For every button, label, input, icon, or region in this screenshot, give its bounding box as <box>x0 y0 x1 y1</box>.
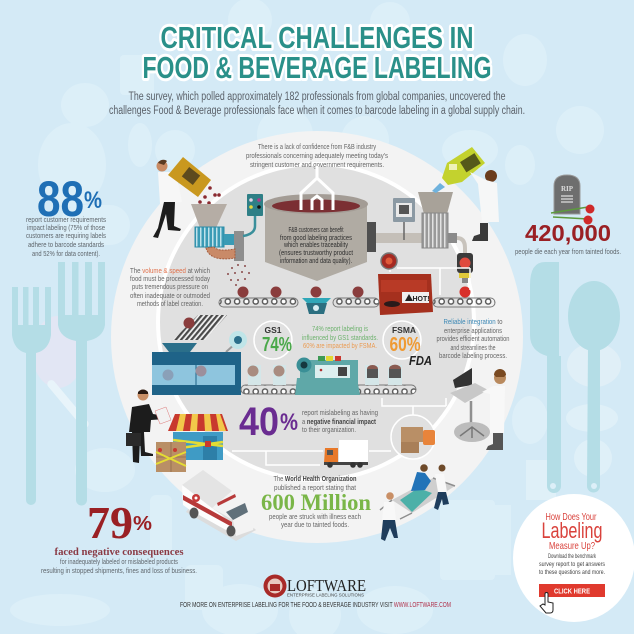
volume and speed text: puts tremendous pressure on <box>132 284 208 291</box>
negative impact text <box>302 408 378 434</box>
88 percent description: customers are requiring labels <box>26 231 106 240</box>
icon: person pouring bottle <box>432 147 499 241</box>
control panel <box>243 194 263 236</box>
40 percent stat <box>239 400 378 444</box>
WHO stat: published a report stating that <box>274 483 357 492</box>
Loftware logo <box>264 574 366 598</box>
88 percent description: adhere to barcode standards <box>28 240 104 249</box>
paramedics with stretcher <box>380 464 455 541</box>
FSMA stat: FSMA <box>392 325 416 335</box>
icon: small fork <box>12 287 51 505</box>
40 percent stat: 40 <box>239 400 279 444</box>
truck <box>324 440 368 468</box>
confidence text: stringent customer and government requirements. <box>250 162 384 169</box>
88 percent description: impact labeling (75% of those <box>27 223 105 232</box>
click here button: CLICK HERE <box>554 586 590 596</box>
negative impact text: a negative financial impact <box>302 417 376 426</box>
WHO stat: year due to tainted foods. <box>281 520 349 529</box>
40 percent stat: % <box>280 409 298 436</box>
88 percent description: report customer requirements <box>26 215 106 224</box>
laptop workstation <box>382 368 506 450</box>
negative impact text: to their organization. <box>302 425 356 434</box>
79 percent stat: % <box>133 513 152 535</box>
Loftware logo: LOFTWARE <box>287 576 366 595</box>
central circle <box>111 131 523 543</box>
tank text: F&B customers can benefit <box>288 227 344 234</box>
reliable integration text: enterprise applications <box>444 328 502 335</box>
lower conveyor and labeller <box>241 356 416 395</box>
reliable integration text <box>436 319 510 360</box>
confidence text <box>246 144 388 169</box>
businessman <box>126 390 171 463</box>
420,000 stat <box>515 220 621 256</box>
88 percent stat <box>26 171 106 258</box>
confidence text: professionals concerning adequately meeting today's <box>246 153 388 160</box>
connector lines <box>232 451 391 465</box>
tank text: from good labeling practices <box>280 235 352 242</box>
consequences text: faced negative consequences <box>54 547 184 558</box>
volume and speed text <box>130 268 210 308</box>
FDA logo: FDA <box>409 353 432 368</box>
consequences text: resulting in stopped shipments, fines and loss of business. <box>41 566 197 575</box>
tank text: which enables traceability <box>283 242 348 249</box>
icon: large fork <box>58 262 105 506</box>
GS1 and FSMA text <box>302 326 378 350</box>
GS1 stat: 74% <box>262 334 292 356</box>
tank text: information and data quality). <box>280 258 352 265</box>
call to action circle: survey report to get answers <box>539 561 606 568</box>
ingredients falling <box>198 186 221 205</box>
88 percent description: and 52% for data content). <box>32 249 100 258</box>
icon: hand cursor <box>540 592 553 613</box>
title <box>142 20 492 85</box>
call to action circle: Measure Up? <box>549 540 595 552</box>
boxes circle <box>391 415 435 459</box>
icon: knife <box>530 262 561 493</box>
reliable integration text: barcode labeling process. <box>439 353 507 360</box>
jars <box>367 365 401 378</box>
reliable integration text: Reliable integration to <box>444 319 503 326</box>
icon: gravestone with flowers <box>551 175 594 224</box>
volume and speed text: methods of label creation. <box>137 301 203 308</box>
reliable integration text: and streamlines the <box>450 345 496 352</box>
boxes <box>156 442 186 472</box>
intro text: The survey, which polled approximately 182 professionals from global companies, uncovered the <box>128 91 506 103</box>
FSMA stat: 60% <box>390 334 421 356</box>
Loftware logo: ENTERPRISE LABELING SOLUTIONS <box>287 592 364 598</box>
red hot machine: HOT! <box>412 296 430 303</box>
right processing machine <box>376 192 473 283</box>
tank text: (ensures trustworthy product <box>279 250 353 257</box>
call to action circle: Download the benchmark <box>548 553 596 560</box>
icon: spoon <box>568 281 620 493</box>
GS1 stat <box>254 321 292 359</box>
call to action circle: Labeling <box>542 518 602 543</box>
particles <box>227 264 250 286</box>
79 percent stat: 79 <box>87 497 133 548</box>
reliable integration text: provides efficient automation <box>436 336 510 343</box>
forks <box>12 262 105 506</box>
dispenser <box>457 253 473 273</box>
mixer paddle <box>301 166 333 210</box>
icon: man pouring bag <box>153 157 221 238</box>
packaging line machine <box>152 315 247 395</box>
consequences text: for inadequately labeled or mislabeled products <box>60 557 178 566</box>
WHO stat <box>261 474 371 529</box>
volume and speed text: food must be processed today <box>130 276 210 283</box>
consequences text <box>41 547 197 575</box>
88 percent description <box>26 215 106 258</box>
GS1 stat: GS1 <box>264 325 282 335</box>
GS1 and FSMA text: 60% are impacted by FSMA. <box>303 343 377 350</box>
call to action circle: How Does Your <box>546 511 597 523</box>
confidence text: There is a lack of confidence from F&B industry <box>258 144 376 151</box>
title: FOOD & BEVERAGE LABELING <box>142 50 492 85</box>
negative impact text: report mislabeling as having <box>302 408 378 417</box>
FSMA stat <box>383 321 421 359</box>
red hot machine <box>378 253 470 315</box>
footer text: FOR MORE ON ENTERPRISE LABELING FOR THE FOOD & BEVERAGE INDUSTRY VISIT WWW.LOFTWARE.COM <box>180 600 451 609</box>
shop with boxes <box>156 414 228 472</box>
88 percent stat: 88 <box>37 171 84 227</box>
GS1 and FSMA text: influenced by GS1 standards. <box>302 335 378 342</box>
WHO stat: 600 Million <box>261 490 371 515</box>
tank text <box>279 227 353 265</box>
ambulance <box>182 470 256 541</box>
conveyor belt top <box>219 286 495 307</box>
product balls <box>238 286 364 298</box>
WHO stat: people are struck with illness each <box>269 512 361 521</box>
GS1 and FSMA text: 74% report labeling is <box>312 326 368 333</box>
79 percent stat <box>41 497 197 575</box>
knife and spoon <box>530 262 620 493</box>
88 percent stat: % <box>84 187 102 214</box>
mixing tank with text <box>264 166 376 281</box>
icon: gravestone with flowers: RIP <box>561 185 574 193</box>
intro text <box>109 91 525 117</box>
call to action circle: to these questions and more. <box>539 569 605 576</box>
scale <box>302 298 331 314</box>
title: CRITICAL CHALLENGES IN <box>160 20 474 55</box>
labeller <box>295 360 360 395</box>
left hopper machine <box>191 204 250 286</box>
call to action circle <box>513 494 634 622</box>
WHO stat: The World Health Organization <box>274 474 357 483</box>
volume and speed text: often inadequate or outmoded <box>130 293 210 300</box>
volume and speed text: The volume & speed at which <box>130 268 210 275</box>
420,000 stat: 420,000 <box>525 220 611 246</box>
